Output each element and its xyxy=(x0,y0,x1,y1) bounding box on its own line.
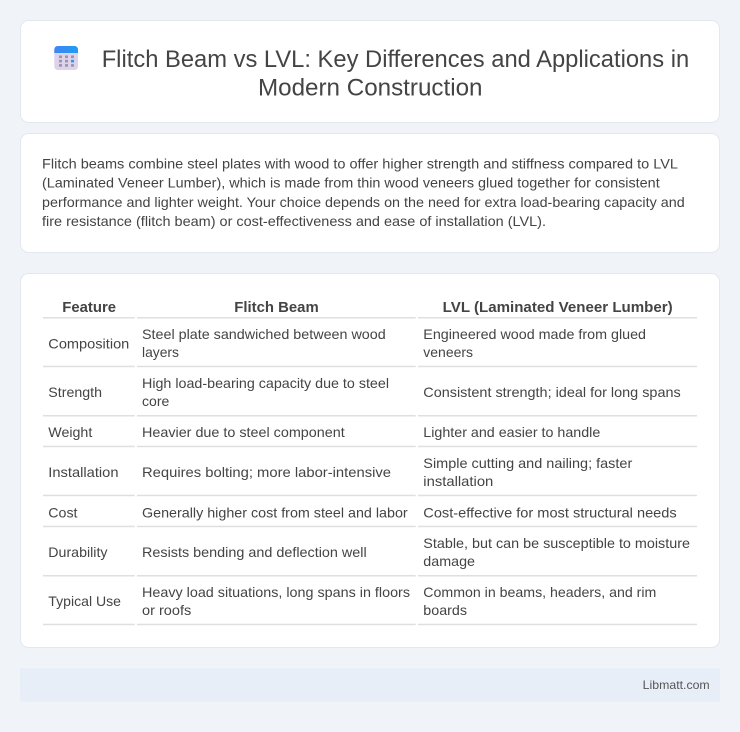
row: Installation: Simple cutting and nailing; faster xyxy=(423,455,633,471)
row: Durability: Durability xyxy=(48,544,108,560)
row: Strength: Strength xyxy=(48,384,102,400)
intro paragraph xyxy=(42,155,685,229)
row: Composition: veneers xyxy=(423,344,473,360)
row: Typical Use: Heavy load situations, long spans in floors xyxy=(142,584,410,600)
row: Weight: Heavier due to steel component xyxy=(142,424,345,440)
row: Typical Use: Typical Use xyxy=(48,593,121,609)
row: Composition: Engineered wood made from glued xyxy=(423,326,646,342)
row: Durability: Stable, but can be susceptible to moisture xyxy=(423,535,690,551)
row: Cost xyxy=(48,504,677,520)
row: Typical Use: boards xyxy=(423,602,467,618)
table header: Flitch Beam xyxy=(234,299,319,316)
row: Durability: Resists bending and deflection well xyxy=(142,544,367,560)
intro paragraph: performance and lighter weight. Your choice depends on the need for extra load-bearing capacity and xyxy=(42,194,685,210)
row: Composition: layers xyxy=(142,344,179,360)
title: Modern Construction xyxy=(258,74,482,102)
row: Cost: Cost xyxy=(48,504,78,520)
row: Weight xyxy=(48,424,601,440)
panel: comparison table card xyxy=(20,274,720,648)
row: Strength: Consistent strength; ideal for long spans xyxy=(423,384,681,400)
row: Installation xyxy=(48,455,633,489)
row: Strength xyxy=(48,375,681,409)
row: Installation: installation xyxy=(423,473,493,489)
table header xyxy=(62,299,673,316)
row: Composition: Composition xyxy=(48,335,129,351)
panel: title card xyxy=(20,20,720,122)
intro paragraph: fire resistance (flitch beam) or cost-effectiveness and ease of installation (LVL). xyxy=(42,213,546,229)
row: Typical Use xyxy=(48,584,656,618)
panel: intro text card xyxy=(20,134,720,252)
icon: calendar xyxy=(54,46,78,70)
row: Durability xyxy=(48,535,690,569)
row: Cost: Generally higher cost from steel and labor xyxy=(142,504,408,520)
row: Strength: High load-bearing capacity due to steel xyxy=(142,375,389,391)
intro paragraph: (Laminated Veneer Lumber), which is made from thin wood veneers glued together for consistent xyxy=(42,174,660,190)
footer: Libmatt.com xyxy=(643,678,710,692)
row: Cost: Cost-effective for most structural needs xyxy=(423,504,677,520)
row: Typical Use: Common in beams, headers, and rim xyxy=(423,584,656,600)
title xyxy=(102,46,689,102)
intro paragraph: Flitch beams combine steel plates with wood to offer higher strength and stiffness compared to LVL xyxy=(42,155,678,171)
row: Strength: core xyxy=(142,393,170,409)
table header: Feature xyxy=(62,299,116,316)
row: Installation: Requires bolting; more labor-intensive xyxy=(142,464,391,480)
title: Flitch Beam vs LVL: Key Differences and Applications in xyxy=(102,46,689,73)
table header: LVL (Laminated Veneer Lumber) xyxy=(443,299,673,316)
row: Typical Use: or roofs xyxy=(142,602,191,618)
row: Composition: Steel plate sandwiched between wood xyxy=(142,326,386,342)
footer xyxy=(20,668,720,702)
row: Weight: Weight xyxy=(48,424,92,440)
row: Installation: Installation xyxy=(48,464,118,480)
row: Durability: damage xyxy=(423,553,475,569)
row: Composition xyxy=(48,326,646,360)
row: Weight: Lighter and easier to handle xyxy=(423,424,601,440)
